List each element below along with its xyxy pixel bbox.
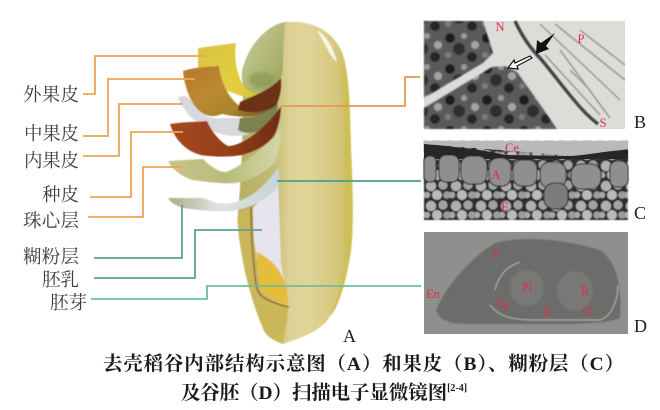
red-brown inner pericarp <box>170 106 281 157</box>
label: C: C <box>634 203 646 223</box>
grain body <box>238 22 353 344</box>
orange mesocarp <box>183 66 281 117</box>
marker Cr: Cr <box>582 304 595 318</box>
pointer: 珠心层 <box>88 167 183 217</box>
white gap behind testa <box>214 158 232 170</box>
pointer: aleurone to panel C <box>277 180 421 182</box>
scutellum outline <box>490 262 618 320</box>
marker Ce: Ce <box>505 141 519 155</box>
pericarp streaks <box>540 24 625 118</box>
marker En: En <box>426 287 441 301</box>
illustration: dehusked rice grain A <box>168 22 353 344</box>
olive shaded membrane <box>238 104 278 133</box>
marker Cp: Cp <box>495 297 509 311</box>
dark brown underside <box>238 78 281 112</box>
label: 内果皮: 内果皮 <box>24 151 79 172</box>
marker S: S <box>600 116 607 130</box>
label: 胚乳: 胚乳 <box>42 270 79 291</box>
yellow right rim <box>330 60 353 316</box>
dark membrane band <box>515 21 598 124</box>
label: 中果皮: 中果皮 <box>24 124 79 145</box>
marker A: A <box>491 168 501 182</box>
highlight on grain shoulder <box>317 30 337 62</box>
brown seam <box>251 207 289 307</box>
plumule <box>510 270 544 306</box>
pointer: 内果皮 <box>83 104 183 156</box>
dark cuticle band <box>424 144 628 159</box>
radicle <box>557 271 593 311</box>
cell bottom <box>424 66 557 129</box>
nucellus and aleurone layer <box>168 168 279 211</box>
solid arrow <box>536 33 555 54</box>
label: 珠心层: 珠心层 <box>23 211 79 232</box>
panel B: pericarp micrograph <box>424 20 625 130</box>
dark green shade <box>249 72 275 88</box>
layer labels <box>23 85 87 314</box>
label: B: B <box>634 112 646 132</box>
pale membrane layer <box>178 96 274 136</box>
pointer: 外果皮 <box>83 56 205 94</box>
marker P: P <box>578 32 585 46</box>
white endosperm <box>253 178 288 305</box>
pointer: 种皮 <box>90 132 183 197</box>
caption <box>103 352 624 404</box>
aleurone cell row <box>424 155 628 209</box>
pointer: 胚乳 <box>94 230 262 278</box>
pointer: 胚芽 <box>91 286 421 299</box>
panel D: embryo micrograph <box>424 232 628 334</box>
pointer: 糊粉层 <box>94 205 182 258</box>
olive seed coat <box>168 128 281 183</box>
yellow embryo <box>257 252 288 305</box>
caption line 2: 及谷胚（D）扫描电子显微镜图 <box>181 383 447 404</box>
label: A: A <box>343 326 356 346</box>
label: 胚芽: 胚芽 <box>50 293 87 314</box>
marker R: R <box>581 284 590 298</box>
caption line 1: 去壳稻谷内部结构示意图（A）和果皮（B）、糊粉层（C） <box>103 352 624 375</box>
cut-away husk layer <box>238 207 288 344</box>
marker E: E <box>544 305 552 319</box>
cell top left <box>424 21 493 98</box>
embryo silhouette <box>436 239 620 324</box>
label: 糊粉层: 糊粉层 <box>23 247 79 268</box>
label: 外果皮: 外果皮 <box>23 85 79 106</box>
label: 种皮: 种皮 <box>42 185 79 206</box>
marker Pl: Pl <box>522 280 533 294</box>
marker E: E <box>501 200 509 214</box>
marker N: N <box>495 20 505 34</box>
marker S: S <box>492 247 499 261</box>
pointer: pericarp to panel B <box>282 77 420 106</box>
pointer: 中果皮 <box>83 79 195 136</box>
grain green shoulder <box>242 22 285 93</box>
panel C: aleurone micrograph <box>424 141 628 220</box>
yellow outer pericarp <box>198 43 267 97</box>
label: D: D <box>634 316 647 336</box>
open arrow <box>508 56 532 69</box>
caption line 2: [2-4] <box>447 383 467 394</box>
top light strip <box>424 141 628 156</box>
